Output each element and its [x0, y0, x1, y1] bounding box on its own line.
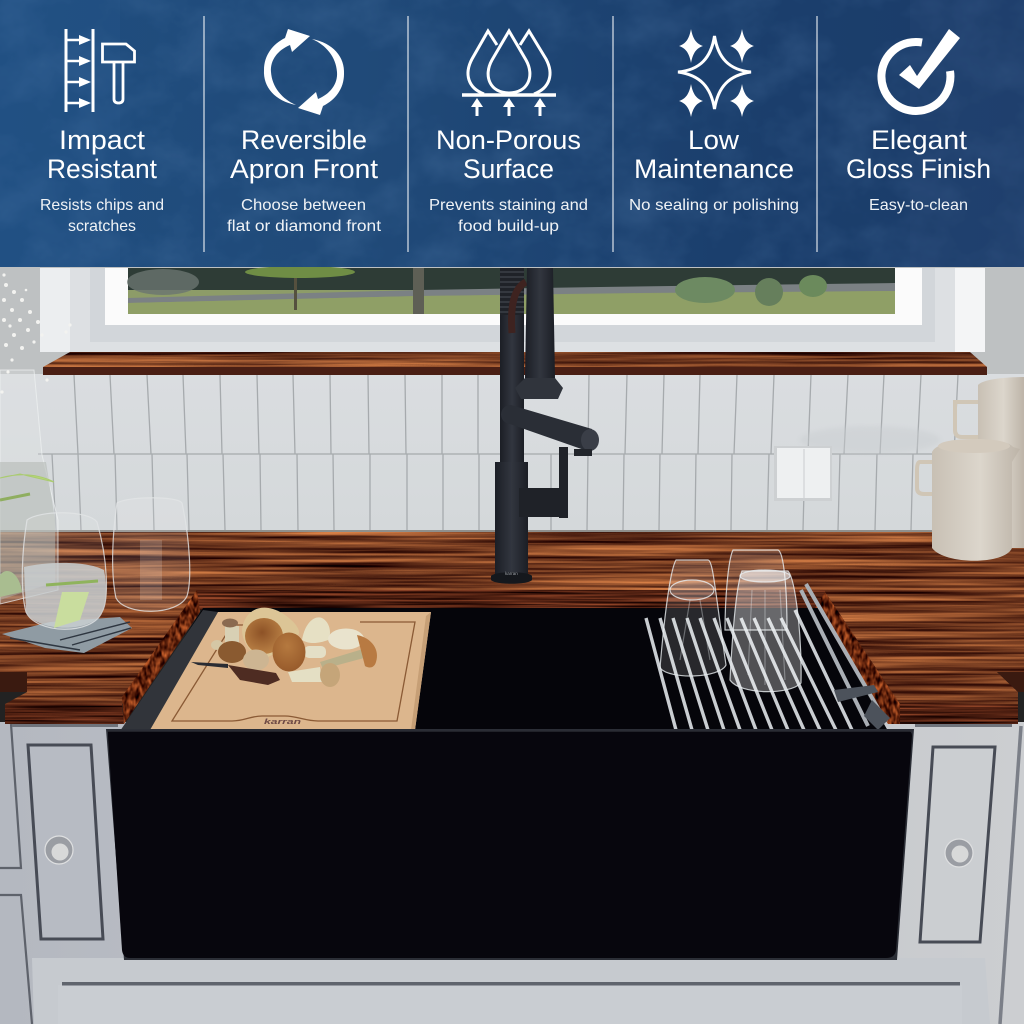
heading: Low	[688, 125, 740, 155]
icon: check in circle	[881, 29, 960, 111]
icon: reversing arrows	[264, 29, 344, 115]
description: scratches	[68, 218, 136, 235]
heading: Resistant	[47, 154, 157, 184]
faucet curved pull-down hose	[512, 282, 526, 333]
upside-down glasses	[660, 550, 801, 692]
window	[40, 266, 985, 352]
right door panel and knob	[920, 747, 995, 942]
heading	[634, 125, 794, 184]
heading: Apron Front	[230, 154, 379, 184]
board logo: karran	[264, 719, 301, 726]
description: Easy-to-clean	[869, 197, 968, 214]
heading	[230, 125, 379, 184]
feature: Reversible Apron Front	[227, 29, 382, 235]
heading	[436, 125, 581, 184]
white jugs	[917, 377, 1024, 561]
baby's breath flowers	[0, 273, 72, 394]
rear jug	[955, 377, 1024, 548]
faucet lever handle	[519, 447, 568, 518]
sink apron front	[106, 729, 914, 960]
faucet	[491, 268, 599, 584]
description	[227, 197, 382, 235]
front jug	[917, 439, 1020, 561]
board groove	[172, 622, 415, 721]
description: No sealing or polishing	[629, 197, 799, 214]
top banner	[0, 0, 1024, 267]
faucet spray head	[525, 268, 555, 378]
description: food build-up	[458, 218, 559, 235]
faucet ribbed hose	[500, 268, 524, 318]
wall background	[0, 260, 1024, 380]
faucet: karran	[505, 571, 518, 576]
folded napkin	[2, 617, 132, 653]
description: Prevents staining and	[429, 197, 588, 214]
feature: Impact Resistant	[40, 29, 164, 235]
wood countertop	[0, 528, 1024, 728]
cutting board	[150, 608, 431, 730]
window view: landscape	[127, 266, 895, 314]
heading: Impact	[59, 125, 146, 155]
dividers	[204, 16, 817, 252]
faucet base body	[495, 462, 528, 578]
empty wine glass	[113, 498, 190, 611]
description: Resists chips and	[40, 197, 164, 214]
lower drawer front	[58, 982, 962, 1024]
feature: Non-Porous Surface	[429, 31, 588, 235]
wall switch	[774, 446, 832, 501]
water pitcher	[0, 370, 58, 604]
description: flat or diamond front	[227, 218, 382, 235]
description	[429, 197, 588, 235]
heading: Maintenance	[634, 154, 794, 184]
heading: Gloss Finish	[846, 154, 991, 184]
heading: Reversible	[241, 125, 367, 155]
backsplash tiles	[0, 374, 1024, 532]
heading: Non-Porous	[436, 125, 581, 155]
feature: Low Maintenance	[629, 29, 799, 214]
sink interior	[120, 608, 888, 731]
description	[40, 197, 164, 235]
feature: Elegant Gloss Finish	[846, 29, 991, 214]
mushrooms	[191, 608, 377, 687]
cabinets	[0, 722, 1024, 1024]
glass with lime water	[22, 513, 106, 629]
left door panel and knob	[28, 745, 103, 939]
drying rack	[646, 584, 890, 730]
heading: Elegant	[871, 125, 968, 155]
icon: wall and hammer	[66, 29, 134, 112]
icon: sparkles	[678, 29, 754, 117]
heading	[47, 125, 157, 184]
icon: water drops on surface	[462, 31, 556, 116]
faucet spout	[501, 405, 592, 452]
heading: Surface	[463, 154, 554, 184]
faucet upright pipe	[500, 315, 524, 465]
heading	[846, 125, 991, 184]
window shelf	[43, 352, 987, 375]
description: Choose between	[241, 197, 366, 214]
